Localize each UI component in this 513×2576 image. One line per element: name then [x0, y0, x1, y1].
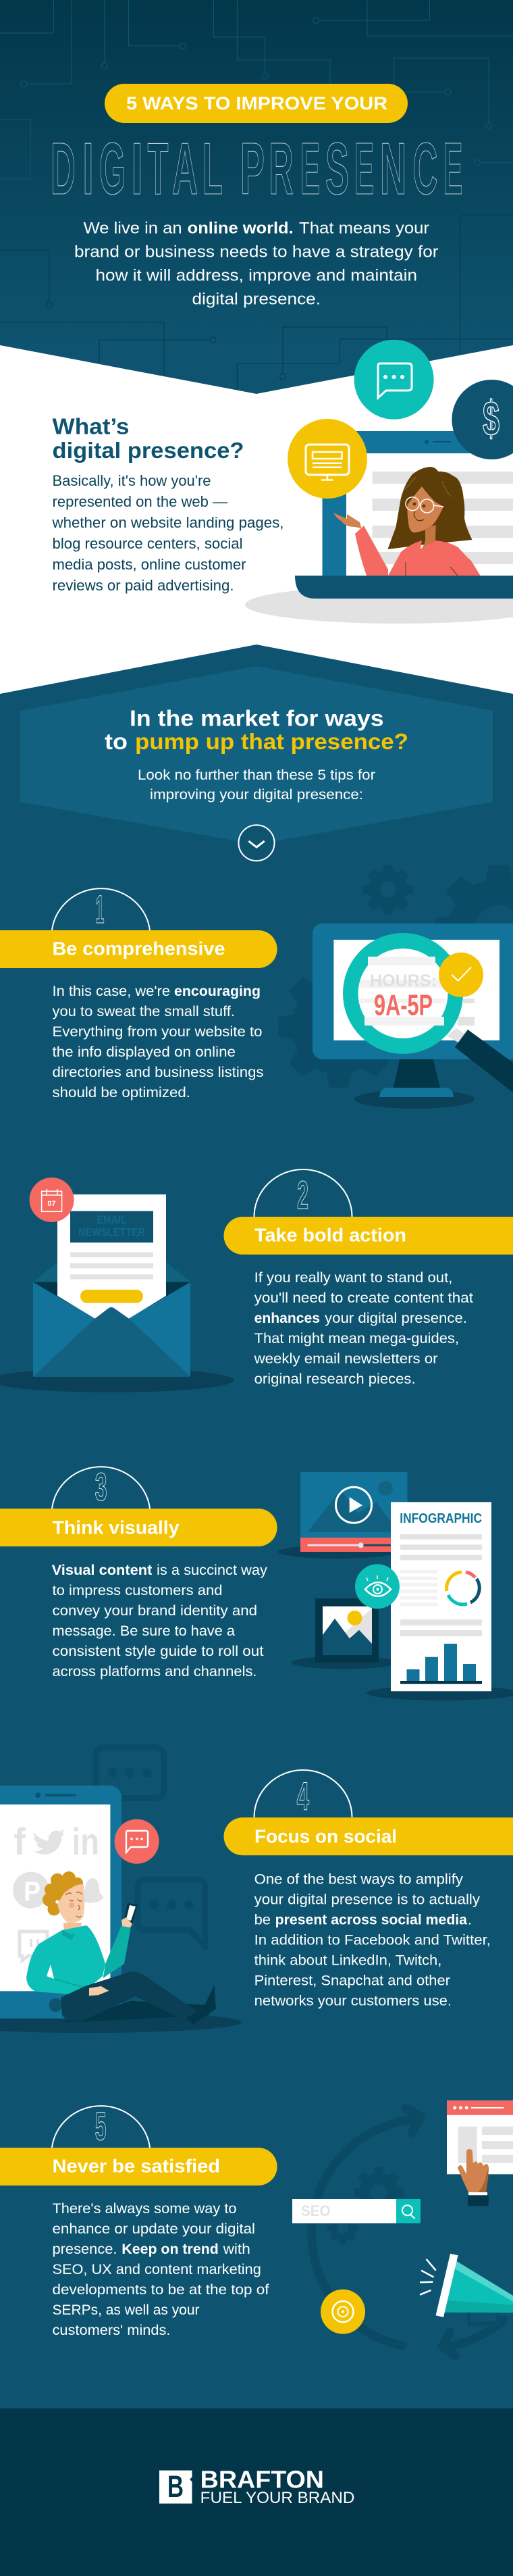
title: digital presence outlined: I — [131, 128, 143, 210]
tip 5 text: SEO, UX and content marketing — [53, 2262, 261, 2277]
tip 2 text: enhances — [254, 1311, 320, 1326]
monitor with magnifier illustration: 9A-5P — [374, 989, 433, 1022]
intro paragraph: We live in an — [84, 220, 182, 238]
title: digital presence outlined: I — [82, 128, 94, 210]
tip 4 number arc: 4 — [297, 1775, 309, 1819]
tip 1 title pill: Be comprehensive — [53, 938, 225, 959]
Brafton logo: B — [167, 2469, 184, 2504]
title: digital presence outlined: A — [172, 128, 198, 210]
tip 3 title pill: Think visually — [53, 1517, 180, 1538]
tip 5 text: with — [223, 2242, 250, 2257]
icon: calendar in coral circle: 07 — [47, 1200, 56, 1208]
what's digital presence description — [51, 472, 284, 594]
title: digital presence outlined: L — [202, 128, 223, 210]
arrow: chevron down circle — [239, 825, 274, 861]
tip 2 title pill: Take bold action — [254, 1225, 406, 1246]
tips intro text: Look no further than these 5 tips for — [138, 767, 375, 783]
tip 1 text: directories and business listings — [53, 1065, 263, 1080]
tip 4 text: In addition to Facebook and Twitter, — [254, 1932, 491, 1948]
title: digital presence outlined: S — [325, 128, 349, 210]
tip 2 number arc — [254, 1169, 352, 1217]
intro paragraph — [74, 220, 439, 309]
tip 1 text — [53, 984, 263, 1101]
title: digital presence outlined: G — [99, 128, 126, 210]
Brafton logo: BRAFTON — [200, 2465, 324, 2493]
tip 1 number arc — [52, 888, 150, 932]
icon: dollar sign in blue circle — [452, 380, 513, 459]
tip 1 text: Everything from your website to — [53, 1024, 262, 1040]
tip 5 text: Keep on trend — [122, 2242, 219, 2257]
tips heading: In the market for ways — [130, 705, 384, 730]
footer band — [0, 2408, 513, 2576]
tip 3 text: consistent style guide to roll out — [53, 1644, 264, 1659]
SEO search bar: SEO — [301, 2202, 331, 2219]
cycle arrows and gears — [312, 2108, 504, 2356]
tip 2 text: you'll need to create content that — [254, 1290, 473, 1306]
intro paragraph: That means your — [299, 220, 429, 238]
megaphone — [420, 2254, 513, 2325]
tip 3 text: across platforms and channels. — [53, 1664, 256, 1680]
title: digital presence outlined — [51, 128, 463, 210]
what's digital presence heading — [53, 414, 244, 463]
tip 4 text: networks your customers use. — [254, 1993, 452, 2009]
monitor with magnifier illustration: HOURS: — [370, 971, 437, 990]
tip 2 number arc: 2 — [297, 1173, 308, 1217]
white section panel — [0, 345, 513, 694]
Brafton logo: FUEL YOUR BRAND — [200, 2489, 354, 2507]
chat bubbles background — [96, 1747, 205, 1947]
tip 5 title pill — [0, 2148, 277, 2186]
what's digital presence description: whether on website landing pages, — [51, 514, 284, 531]
tip 3 title pill — [0, 1509, 277, 1546]
infographic canvas: E — [443, 128, 463, 210]
tip 3 number arc — [52, 1465, 150, 1509]
Brafton logo — [159, 2465, 354, 2507]
title: digital presence outlined: T — [147, 128, 169, 210]
envelope newsletter illustration: NEWSLETTER — [78, 1226, 145, 1238]
tip 4 number arc — [254, 1770, 352, 1819]
icon: dollar sign in blue circle: $ — [483, 392, 500, 446]
tip 2 text: That might mean mega-guides, — [254, 1331, 459, 1346]
tip 4 text — [254, 1871, 491, 2009]
infographic document illustration — [367, 1502, 513, 1700]
laptop illustration with woman — [245, 431, 513, 624]
title: digital presence outlined: E — [354, 128, 374, 210]
tip 5 text: customers' minds. — [53, 2323, 170, 2338]
tip 5 text: SERPs, as well as your — [53, 2302, 200, 2318]
tip 2 text: your digital presence. — [325, 1311, 467, 1326]
tip 2 text: weekly email newsletters or — [254, 1351, 438, 1367]
what's digital presence heading: What’s — [53, 414, 130, 439]
gears background tip 1 — [278, 865, 513, 1088]
tip 4 text: be — [254, 1912, 271, 1927]
icon: eye in teal circle — [355, 1564, 400, 1609]
tip 5 number arc — [52, 2105, 150, 2149]
tip 3 text: message. Be sure to have a — [53, 1623, 235, 1639]
image frame illustration — [292, 1598, 397, 1669]
tip 4 title pill: Focus on social — [254, 1825, 397, 1846]
what's digital presence description: Basically, it's how you're — [53, 472, 211, 489]
tips heading: pump up that presence? — [135, 729, 408, 754]
tip 3 text: to impress customers and — [53, 1583, 223, 1598]
title: digital presence outlined: N — [380, 128, 406, 210]
tip 4 text: present across social media — [275, 1912, 467, 1927]
tip 5 text: developments to be at the top of — [53, 2282, 269, 2298]
tip 1 title pill — [0, 930, 277, 968]
browser window with pointing hand — [447, 2100, 513, 2206]
infographic document illustration: INFOGRAPHIC — [400, 1511, 482, 1526]
tip 5 text — [53, 2201, 269, 2338]
social phone illustration: f — [14, 1820, 26, 1863]
tip 1 text: encouraging — [174, 984, 261, 999]
tip 1 text: In this case, we're — [53, 984, 170, 999]
video player illustration — [278, 1472, 408, 1559]
social phone illustration — [0, 1786, 242, 2033]
title: digital presence outlined: E — [300, 128, 320, 210]
tips intro text — [138, 767, 375, 803]
envelope newsletter illustration: EMAIL — [97, 1213, 127, 1226]
social phone illustration: P — [24, 1877, 40, 1906]
icon: monitor in yellow circle — [288, 419, 367, 499]
title pill: 5 ways to improve your — [105, 84, 408, 123]
tip 1 text: you to sweat the small stuff. — [53, 1004, 235, 1019]
tip 4 text: Pinterest, Snapchat and other — [254, 1973, 450, 1988]
SEO search bar — [292, 2199, 421, 2223]
icon: calendar in coral circle — [30, 1178, 74, 1222]
tip 2 title pill — [224, 1217, 513, 1255]
tip 1 text: should be optimized. — [53, 1085, 190, 1101]
tip 4 text: think about LinkedIn, Twitch, — [254, 1952, 441, 1968]
tip 5 title pill: Never be satisfied — [53, 2156, 220, 2177]
tip 5 text: presence. — [53, 2242, 117, 2257]
tip 5 number arc: 5 — [95, 2105, 107, 2149]
icon: target in yellow circle — [321, 2290, 365, 2334]
tip 3 text: is a succinct way — [157, 1563, 268, 1578]
tip 2 text: If you really want to stand out, — [254, 1270, 452, 1286]
icon: chat bubble in teal circle — [354, 340, 434, 420]
tip 4 text: . — [468, 1912, 472, 1927]
title: digital presence outlined: R — [269, 128, 293, 210]
tips heading — [105, 705, 408, 754]
header gradient background — [0, 0, 513, 351]
what's digital presence description: represented on the web — — [53, 493, 227, 510]
intro paragraph: brand or business needs to have a strategy for — [74, 243, 439, 261]
social phone illustration: in — [72, 1820, 99, 1863]
envelope newsletter illustration — [0, 1194, 234, 1392]
intro paragraph: online world. — [188, 220, 294, 238]
what's digital presence description: blog resource centers, social — [53, 535, 243, 552]
tip 3 text — [52, 1563, 268, 1680]
tip 2 text: original research pieces. — [254, 1371, 416, 1387]
title: digital presence outlined: P — [240, 128, 265, 210]
tips heading: to — [105, 729, 128, 754]
tip 2 text — [254, 1270, 473, 1387]
title: digital presence outlined: C — [413, 128, 437, 210]
monitor with magnifier illustration — [313, 924, 513, 1109]
panel: call to tips hexagon — [20, 666, 493, 844]
tip 5 text: enhance or update your digital — [53, 2221, 255, 2237]
tip 5 text: There's always some way to — [53, 2201, 236, 2217]
tips intro text: improving your digital presence: — [150, 787, 363, 803]
tip 4 title pill — [224, 1817, 513, 1855]
tip 1 number arc: 1 — [96, 888, 104, 932]
man sitting with phone — [26, 1871, 216, 2025]
tip 1 text: the info displayed on online — [53, 1044, 236, 1060]
tip 3 number arc: 3 — [95, 1465, 107, 1509]
tip 3 text: convey your brand identity and — [53, 1603, 257, 1619]
what's digital presence heading: digital presence? — [53, 438, 244, 463]
what's digital presence description: media posts, online customer — [53, 556, 246, 573]
title pill: 5 ways to improve your: 5 WAYS TO IMPROVE YOUR — [126, 93, 387, 113]
intro paragraph: how it will address, improve and maintain — [96, 267, 417, 285]
tip 3 text: Visual content — [52, 1563, 152, 1578]
tip 4 text: your digital presence is to actually — [254, 1892, 481, 1907]
what's digital presence description: reviews or paid advertising. — [53, 577, 234, 594]
icon: chat bubble in coral circle — [115, 1819, 159, 1864]
tip 4 text: One of the best ways to amplify — [254, 1871, 464, 1887]
title: digital presence outlined: D — [51, 128, 76, 210]
intro paragraph: digital presence. — [192, 291, 321, 309]
